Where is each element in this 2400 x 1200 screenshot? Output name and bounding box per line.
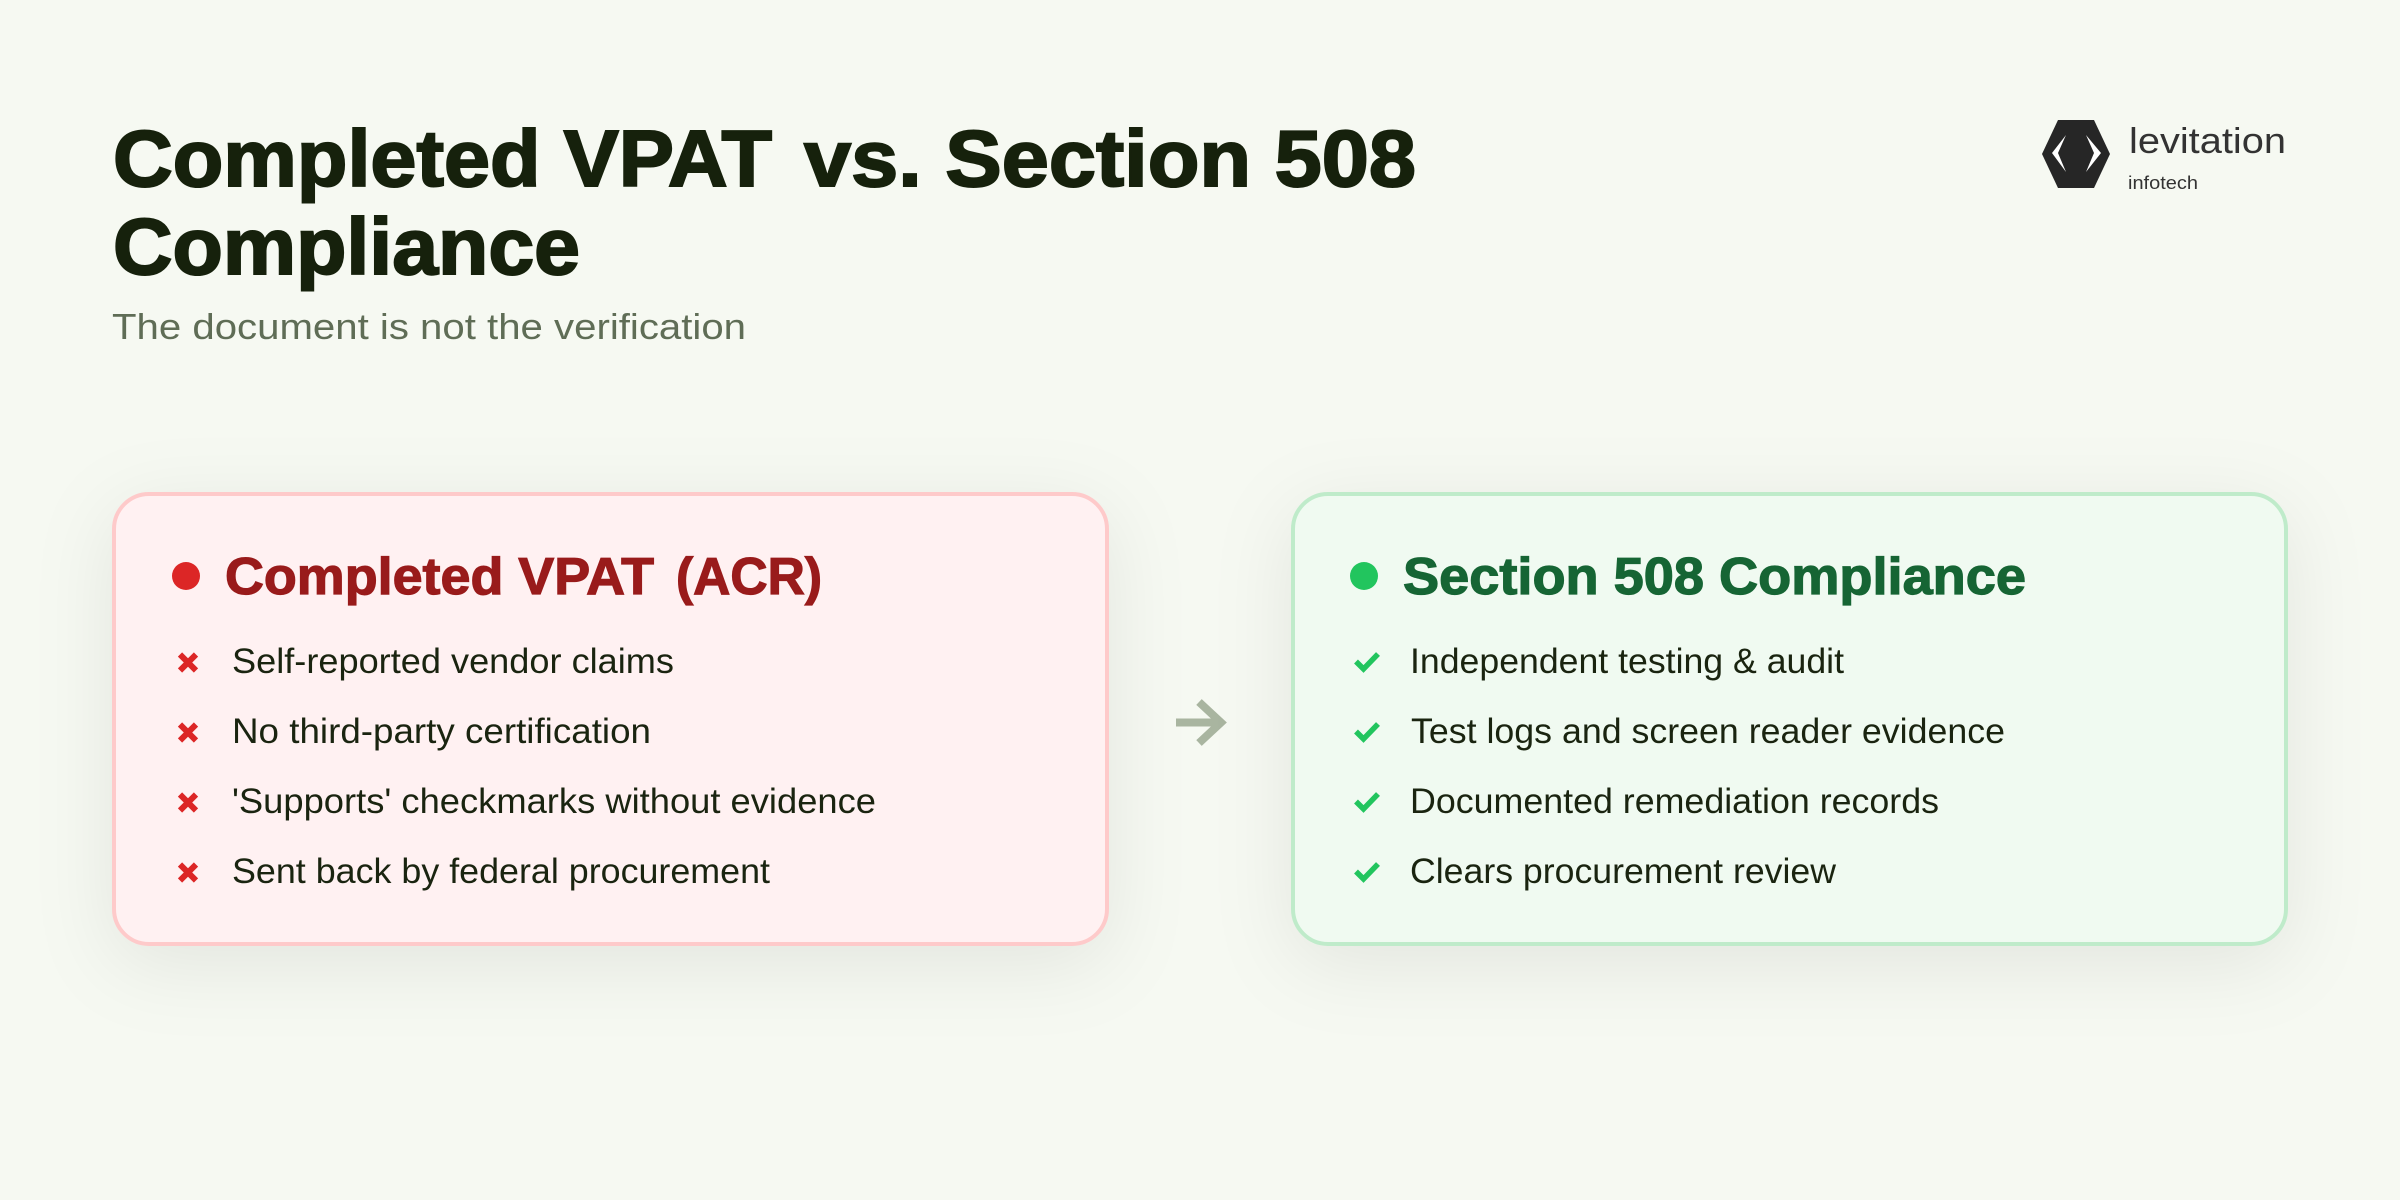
panel heading: (ACR)	[676, 548, 822, 606]
list item: self-reported: Self-reported vendor claims	[232, 642, 674, 681]
list item: clears procurement: Clears procurement review	[1410, 852, 1837, 891]
logo tagline: infotech	[2128, 173, 2198, 193]
list item: remediation records: Documented remediation records	[1410, 782, 1939, 821]
icon: green status dot	[1350, 562, 1378, 590]
panel: section 508 compliance	[1293, 494, 2286, 944]
subtitle: The document is not the verification	[112, 306, 746, 347]
list item: independent testing: Independent testing & audit	[1410, 642, 1844, 681]
panel heading: Section 508 Compliance	[1403, 548, 2026, 606]
title: vs. Section 508	[804, 114, 1416, 203]
list item: test logs: Test logs and screen reader evidence	[1411, 712, 2005, 751]
panel heading: Completed VPAT	[225, 548, 654, 606]
list item: supports checkmarks: 'Supports' checkmarks without evidence	[232, 782, 876, 821]
panel: completed VPAT (ACR)	[114, 494, 1107, 944]
title: Compliance	[113, 202, 580, 291]
list item: no certification: No third-party certification	[232, 712, 651, 751]
logo wordmark: levitation	[2129, 120, 2286, 161]
panel background	[114, 494, 1107, 944]
title: Completed VPAT	[113, 114, 772, 203]
arrow	[1176, 702, 1222, 743]
panel background	[1293, 494, 2286, 944]
logo: levitation infotech	[2042, 120, 2286, 193]
icon: red status dot	[172, 562, 200, 590]
icon: hexagon logo mark	[2042, 120, 2110, 188]
list item: sent back: Sent back by federal procurement	[232, 852, 770, 891]
